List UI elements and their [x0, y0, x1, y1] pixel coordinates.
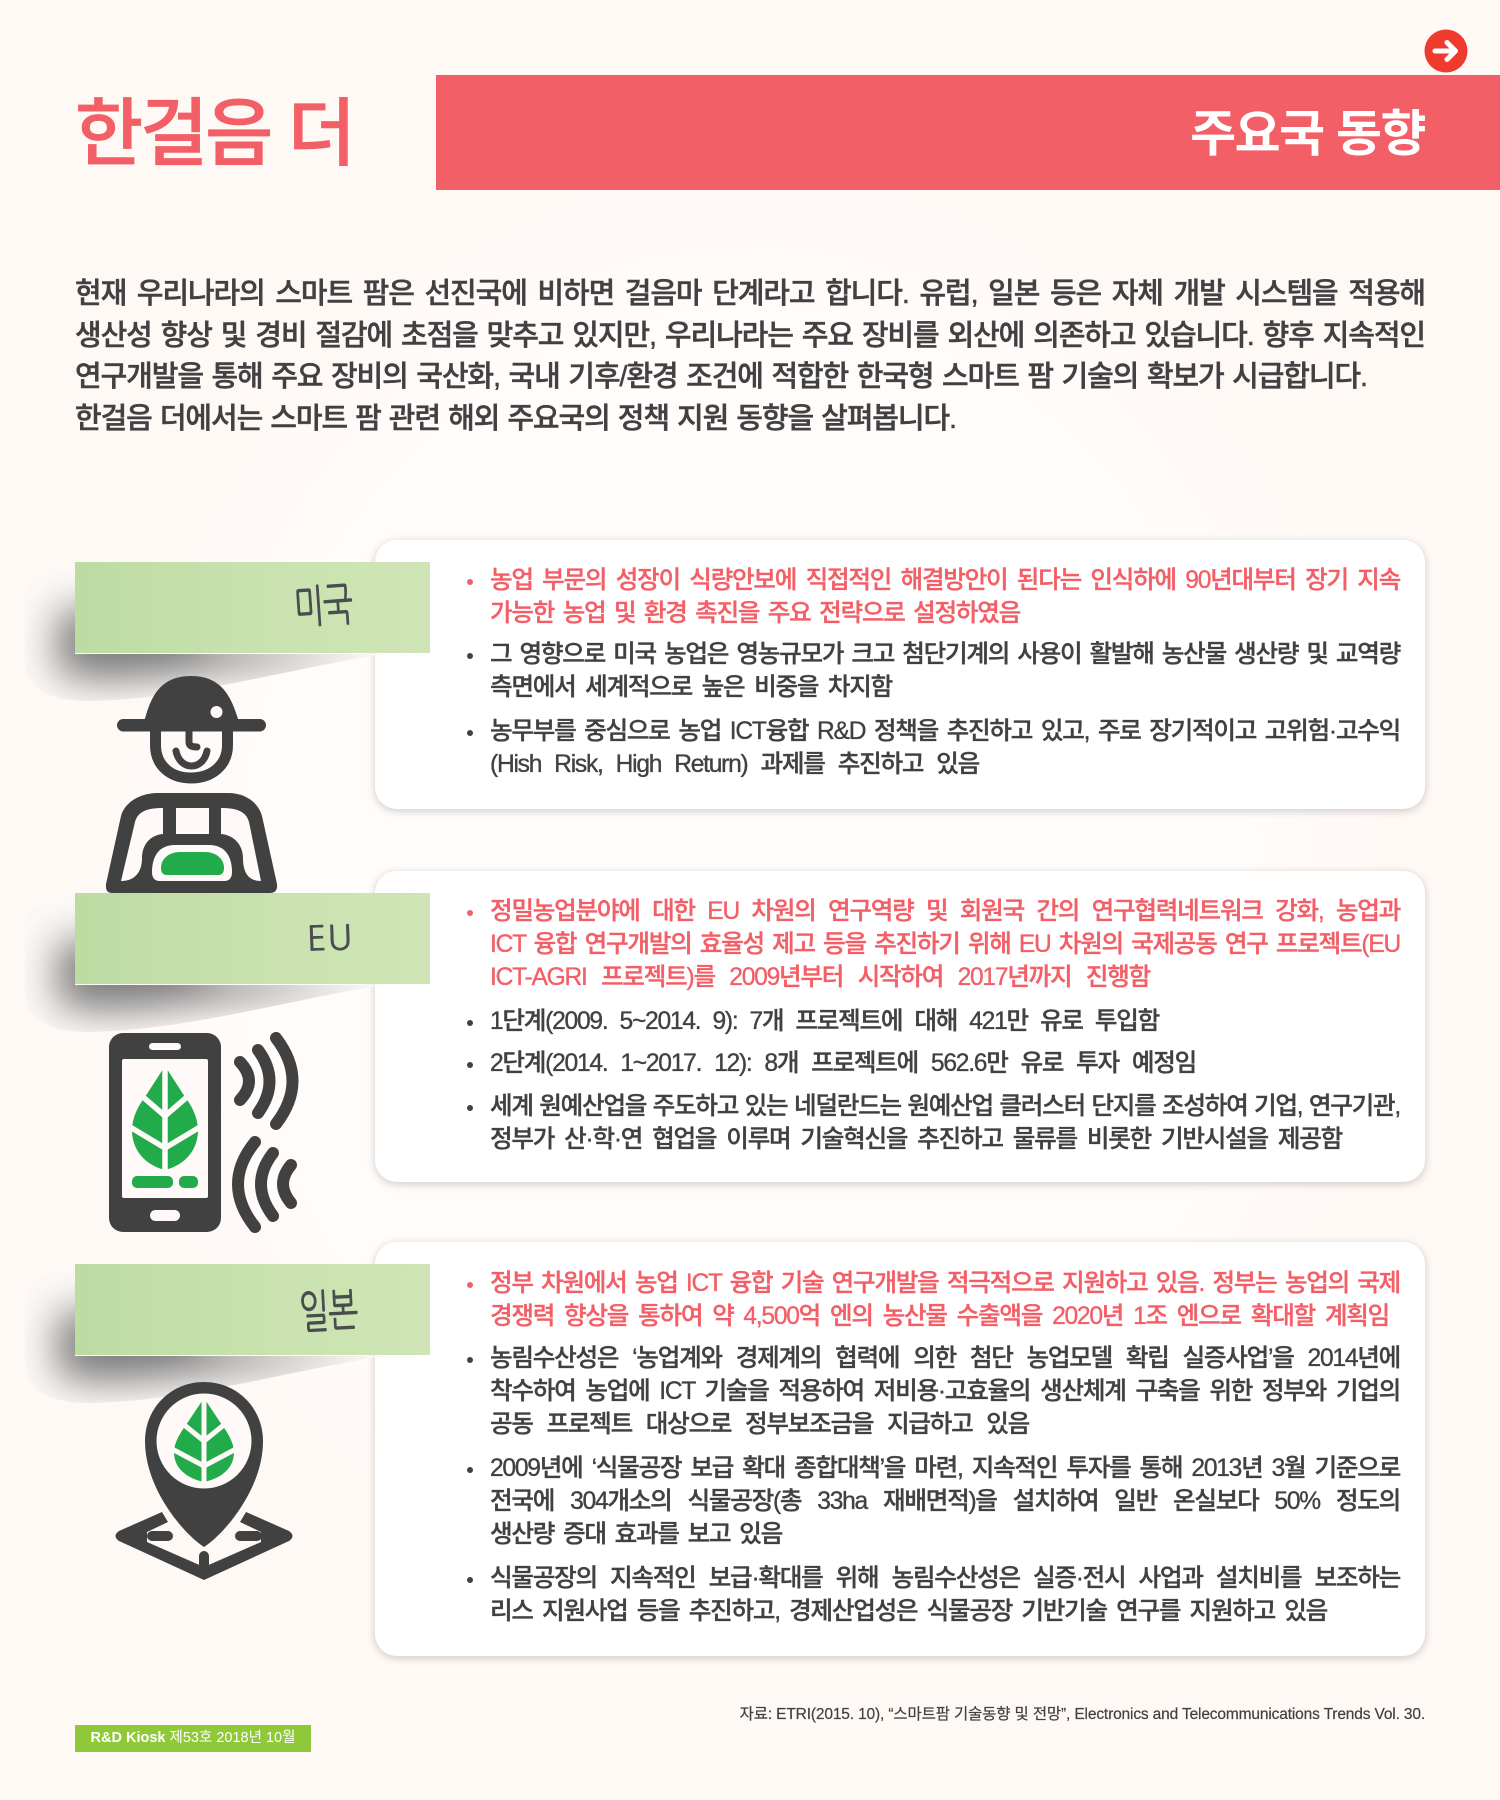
- band shadows: [26, 580, 382, 1403]
- panel: USA: [375, 540, 1425, 809]
- intro text: [75, 278, 1425, 435]
- intro text: 연구개발을 통해 주요 장비의 국산화, 국내 기후/환경 조건에 적합한 한국형 스마트 팜 기술의 확보가 시급합니다.: [75, 361, 1367, 393]
- USA bullet 3: 농무부를 중심으로 농업 ICT융합 R&D 정책을 추진하고 있고, 주로 장기적이고 고위험·고수익: [490, 718, 1400, 744]
- panel: Japan: [375, 1242, 1425, 1656]
- header band: [436, 75, 1500, 190]
- EU bullet 1: 정밀농업분야에 대한 EU 차원의 연구역량 및 회원국 간의 연구협력네트워크 강화, 농업과: [490, 898, 1400, 924]
- panel: EU: [375, 871, 1425, 1182]
- Japan bullet 3: 전국에 304개소의 식물공장(총 33ha 재배면적)을 설치하여 일반 온실보다 50% 정도의: [490, 1488, 1400, 1515]
- USA bullet 1: 가능한 농업 및 환경 촉진을 주요 전략으로 설정하였음: [490, 600, 1020, 627]
- USA bullet 3: (Hish Risk, High Return) 과제를 추진하고 있음: [490, 751, 979, 778]
- EU bullet 4: 정부가 산·학·연 협업을 이루며 기술혁신을 추진하고 물류를 비롯한 기반시설을 제공함: [490, 1126, 1342, 1153]
- EU bullet 1: [490, 896, 1400, 995]
- USA bullet 1: [490, 564, 1400, 631]
- background glow: [100, 150, 1400, 1650]
- EU bullet 3: 2단계(2014. 1~2017. 12): 8개 프로젝트에 562.6만 유로 투자 예정임: [490, 1050, 1196, 1076]
- label: EU: EU: [306, 920, 354, 956]
- intro text: 생산성 향상 및 경비 절감에 초점을 맞추고 있지만, 우리나라는 주요 장비를 외산에 의존하고 있습니다. 향후 지속적인: [75, 320, 1425, 352]
- USA bullet 2: [490, 639, 1400, 705]
- intro text: 현재 우리나라의 스마트 팜은 선진국에 비하면 걸음마 단계라고 합니다. 유럽, 일본 등은 자체 개발 시스템을 적용해: [75, 278, 1425, 310]
- footer tag: [75, 1725, 311, 1752]
- band: EU: [75, 893, 430, 984]
- label: Japan: 일본: [298, 1287, 358, 1335]
- USA bullet 2: 측면에서 세계적으로 높은 비중을 차지함: [490, 674, 892, 701]
- Japan bullet 3: 2009년에 ‘식물공장 보급 확대 종합대책’을 마련, 지속적인 투자를 통해 2013년 3월 기준으로: [490, 1454, 1400, 1482]
- intro text: 한걸음 더에서는 스마트 팜 관련 해외 주요국의 정책 지원 동향을 살펴봅니다.: [75, 403, 956, 435]
- Japan bullet 4: 리스 지원사업 등을 추진하고, 경제산업성은 식물공장 기반기술 연구를 지원하고 있음: [490, 1598, 1327, 1625]
- Japan bullet 2: 공동 프로젝트 대상으로 정부보조금을 지급하고 있음: [490, 1411, 1029, 1438]
- title: 한걸음 더: [75, 92, 353, 175]
- band: Japan: [75, 1264, 430, 1355]
- Japan bullet 2: 착수하여 농업에 ICT 기술을 적용하여 저비용·고효율의 생산체계 구축을 위한 정부와 기업의: [490, 1378, 1400, 1405]
- source note: 자료: ETRI(2015. 10), “스마트팜 기술동향 및 전망”, Electronics and Telecommunications Trends Vol. 30.: [740, 1706, 1425, 1723]
- EU bullet 4: 세계 원예산업을 주도하고 있는 네덜란드는 원예산업 클러스터 단지를 조성하여 기업, 연구기관,: [490, 1092, 1400, 1120]
- icon: arrow button: [1424, 30, 1468, 72]
- Japan bullet 1: 경쟁력 향상을 통하여 약 4,500억 엔의 농산물 수출액을 2020년 1조 엔으로 확대할 계획임: [490, 1303, 1389, 1330]
- EU bullet 2: 1단계(2009. 5~2014. 9): 7개 프로젝트에 대해 421만 유로 투입함: [490, 1008, 1159, 1034]
- Japan bullet 4: 식물공장의 지속적인 보급·확대를 위해 농림수산성은 실증·전시 사업과 설치비를 보조하는: [490, 1564, 1400, 1592]
- section heading: 주요국 동향: [1190, 106, 1425, 162]
- Japan bullet 1: 정부 차원에서 농업 ICT 융합 기술 연구개발을 적극적으로 지원하고 있음. 정부는 농업의 국제: [490, 1270, 1400, 1296]
- EU bullet 1: ICT-AGRI 프로젝트)를 2009년부터 시작하여 2017년까지 진행함: [490, 964, 1150, 991]
- Japan bullet 2: [490, 1342, 1400, 1442]
- EU bullet 4: [490, 1090, 1400, 1157]
- footer tag: R&D Kiosk 제53호 2018년 10월: [91, 1730, 295, 1746]
- EU bullet 1: ICT 융합 연구개발의 효율성 제고 등을 추진하기 위해 EU 차원의 국제공동 연구 프로젝트(EU: [490, 931, 1400, 958]
- Japan bullet 3: [490, 1452, 1400, 1552]
- band: USA: [75, 562, 430, 653]
- icon: smartphone with leaf: [109, 1032, 298, 1233]
- Japan bullet 3: 생산량 증대 효과를 보고 있음: [490, 1521, 782, 1548]
- icon: map pin with leaf: [116, 1382, 292, 1580]
- USA bullet 2: 그 영향으로 미국 농업은 영농규모가 크고 첨단기계의 사용이 활발해 농산물 생산량 및 교역량: [490, 641, 1400, 668]
- Japan bullet 2: 농림수산성은 ‘농업계와 경제계의 협력에 의한 첨단 농업모델 확립 실증사업’을 2014년에: [490, 1344, 1400, 1372]
- icon: farmer: [106, 676, 278, 893]
- USA bullet 3: [490, 716, 1400, 782]
- USA bullet 1: 농업 부문의 성장이 식량안보에 직접적인 해결방안이 된다는 인식하에 90년대부터 장기 지속: [490, 566, 1400, 594]
- label: USA: 미국: [293, 582, 354, 630]
- Japan bullet 4: [490, 1562, 1400, 1629]
- Japan bullet 1: [490, 1268, 1400, 1334]
